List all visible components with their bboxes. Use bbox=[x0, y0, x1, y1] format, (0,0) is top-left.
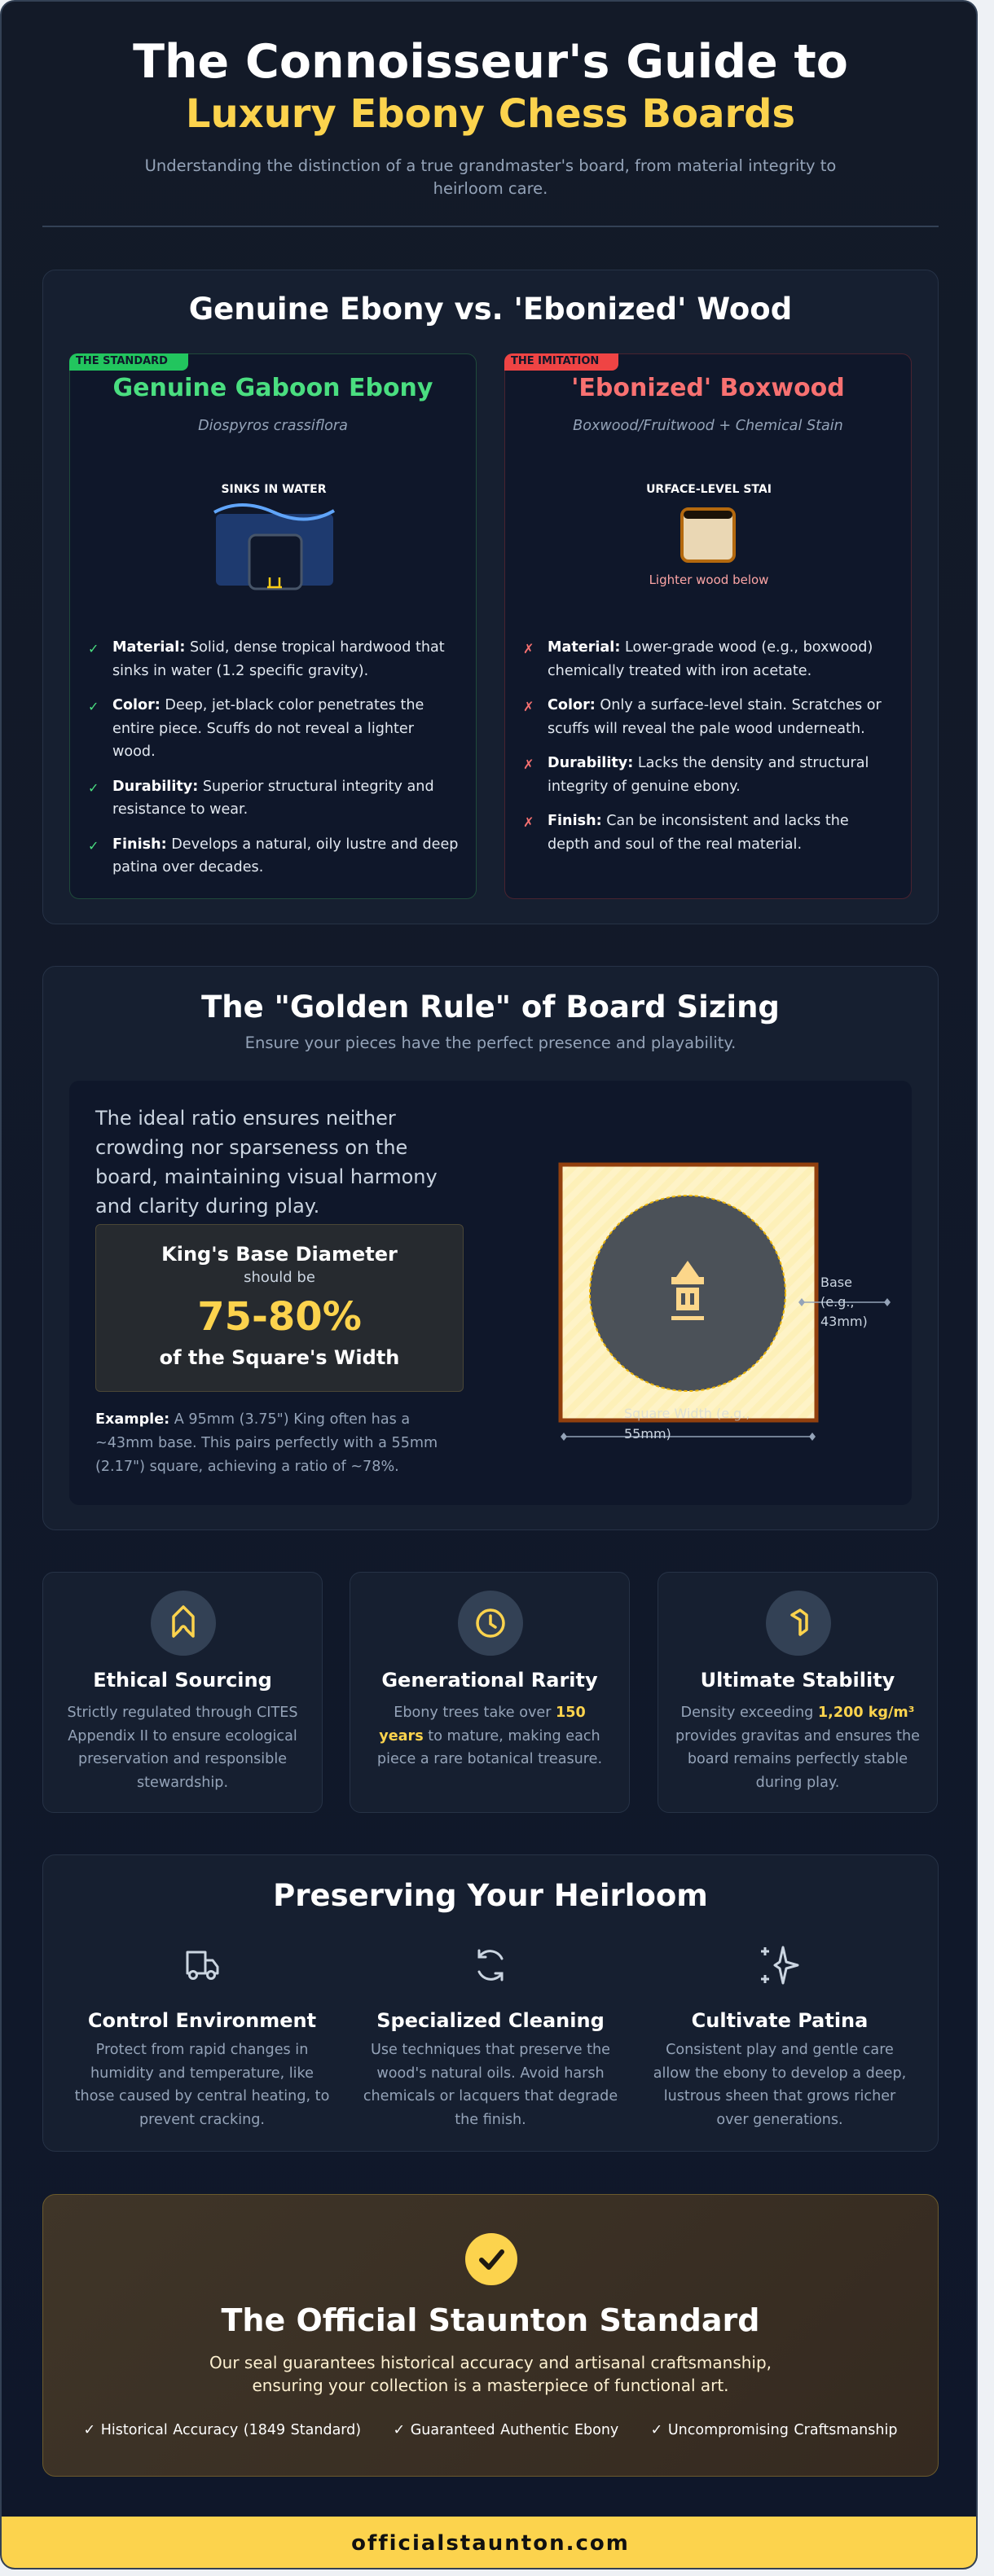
card: ebonized: ✗ bbox=[523, 641, 534, 656]
feature: ultimate stability: Density exceeding 1,200 kg/m³ provides gravitas and ensures the board remains perfectly stable during play. bbox=[675, 1705, 920, 1790]
col: cultivate patina: Consistent play and gentle care allow the ebony to develop a deep, lustrous sheen that grows richer over generations. bbox=[653, 2042, 906, 2127]
feature: generational rarity: Generational Rarity bbox=[381, 1669, 598, 1692]
card: ebonized: ✗ bbox=[523, 814, 534, 830]
col: cultivate patina: Cultivate Patina bbox=[692, 2009, 868, 2032]
list genuine: Material: Solid, dense tropical hardwood that sinks in water (1.2 specific gravity). bbox=[112, 639, 445, 679]
list ebonized: Durability: Lacks the density and structural integrity of genuine ebony. bbox=[548, 755, 869, 795]
tag: the imitation bbox=[504, 353, 618, 371]
title: The Connoisseur's Guide to bbox=[133, 35, 848, 89]
title bbox=[133, 35, 848, 137]
intro text: The ideal ratio ensures neither crowding nor sparseness on the board, maintaining visual harmony and clarity during play. bbox=[95, 1107, 438, 1218]
list genuine: Finish: Develops a natural, oily lustre and deep patina over decades. bbox=[112, 836, 458, 875]
feature: generational rarity bbox=[350, 1572, 630, 1813]
panel: official staunton standard bbox=[42, 2194, 939, 2477]
tag: the imitation: THE IMITATION bbox=[511, 355, 599, 367]
feature: ethical sourcing: Ethical Sourcing bbox=[93, 1669, 272, 1692]
latin name: Diospyros crassiflora bbox=[198, 418, 348, 434]
heading golden rule: The "Golden Rule" of Board Sizing bbox=[201, 990, 780, 1025]
text standard: Our seal guarantees historical accuracy and artisanal craftsmanship, bbox=[209, 2353, 772, 2372]
feature: ethical sourcing bbox=[42, 1572, 323, 1813]
icon: sinks in water bbox=[213, 483, 335, 590]
subtitle: Understanding the distinction of a true grandmaster's board, from material integrity to heirloom care. bbox=[145, 156, 836, 198]
panel: golden rule bbox=[42, 966, 939, 1530]
checklist: ✓ Historical Accuracy (1849 Standard) ✓ Guaranteed Authentic Ebony ✓ Uncompromising Craftsmanship bbox=[84, 2422, 897, 2438]
card title ebonized: 'Ebonized' Boxwood bbox=[571, 374, 845, 402]
icon: sinks in water: SINKS IN WATER bbox=[221, 483, 327, 496]
list ebonized: Finish: Can be inconsistent and lacks the depth and soul of the real material. bbox=[548, 813, 849, 852]
card: genuine: ✓ bbox=[88, 641, 99, 656]
list ebonized: Color: Only a surface-level stain. Scratches or scuffs will reveal the pale wood underneath. bbox=[548, 697, 882, 736]
diagram: square and base: (e.g., bbox=[820, 1294, 854, 1310]
diagram: square and base: Base bbox=[820, 1275, 852, 1290]
col: control environment: Protect from rapid changes in humidity and temperature, like those caused by central heating, to prevent cracking. bbox=[75, 2042, 329, 2127]
card: ebonized: ✗ bbox=[523, 699, 534, 714]
icon: leaf bbox=[151, 1591, 216, 1656]
footer bbox=[2, 2517, 979, 2571]
highlight box: King's Base Diameter bbox=[161, 1243, 398, 1266]
heading preserving: Preserving Your Heirloom bbox=[273, 1878, 708, 1913]
icon: surface stain bbox=[646, 483, 772, 587]
feature: ethical sourcing: Strictly regulated through CITES Appendix II to ensure ecological preservation and responsible stewardship. bbox=[67, 1705, 298, 1790]
icon: surface stain: Lighter wood below bbox=[649, 573, 768, 587]
diagram: square and base: Square Width (e.g., bbox=[624, 1406, 750, 1421]
list genuine: Color: Deep, jet-black color penetrates the entire piece. Scuffs do not reveal a lighter wood. bbox=[112, 697, 424, 760]
col: control environment bbox=[75, 1951, 329, 2127]
tag: the standard: THE STANDARD bbox=[76, 355, 168, 367]
panel: preserving heirloom bbox=[42, 1854, 939, 2152]
card: genuine: ✓ bbox=[88, 699, 99, 714]
text standard bbox=[209, 2353, 772, 2395]
list ebonized: Material: Lower-grade wood (e.g., boxwood) chemically treated with iron acetate. bbox=[548, 639, 873, 679]
highlight box: of the Square's Width bbox=[160, 1346, 399, 1369]
feature: ultimate stability bbox=[658, 1572, 938, 1813]
subtitle ebonized: Boxwood/Fruitwood + Chemical Stain bbox=[573, 418, 843, 434]
diagram: square and base bbox=[559, 1163, 891, 1442]
subheading: Ensure your pieces have the perfect presence and playability. bbox=[245, 1033, 736, 1052]
icon: surface stain: URFACE-LEVEL STAI bbox=[646, 483, 772, 496]
card: ebonized bbox=[504, 353, 912, 899]
list ebonized bbox=[523, 639, 882, 852]
col: specialized cleaning bbox=[363, 1950, 618, 2127]
example text: Example: A 95mm (3.75") King often has a ~43mm base. This pairs perfectly with a 55mm (2.17") square, achieving a ratio of ~78%. bbox=[95, 1411, 438, 1475]
icon: clock bbox=[458, 1591, 523, 1656]
footer: officialstaunton.com bbox=[351, 2531, 630, 2556]
card title genuine: Genuine Gaboon Ebony bbox=[112, 374, 433, 402]
icon: check seal bbox=[465, 2233, 517, 2285]
card: genuine: ✓ bbox=[88, 780, 99, 795]
card: ebonized: ✗ bbox=[523, 757, 534, 772]
inner box bbox=[69, 1081, 912, 1505]
highlight box: 75-80% bbox=[197, 1294, 362, 1340]
list genuine bbox=[88, 639, 458, 875]
diagram: square and base: 55mm) bbox=[624, 1426, 671, 1442]
card: genuine: ✓ bbox=[88, 837, 99, 854]
title: Luxury Ebony Chess Boards bbox=[186, 91, 795, 137]
icon: cube bbox=[766, 1591, 831, 1656]
feature: generational rarity: Ebony trees take over 150 years to mature, making each piece a rare botanical treasure. bbox=[377, 1705, 602, 1767]
heading standard: The Official Staunton Standard bbox=[222, 2302, 759, 2338]
col: control environment: Control Environment bbox=[88, 2009, 316, 2032]
highlight box bbox=[95, 1224, 464, 1392]
col: cultivate patina bbox=[653, 1946, 906, 2127]
panel: genuine vs ebonized bbox=[42, 270, 939, 924]
diagram: square and base: 43mm) bbox=[820, 1314, 868, 1329]
highlight box: should be bbox=[244, 1269, 315, 1286]
tag: the standard bbox=[69, 353, 188, 371]
col: specialized cleaning: Specialized Cleaning bbox=[376, 2009, 605, 2032]
col: specialized cleaning: Use techniques that preserve the wood's natural oils. Avoid harsh chemicals or lacquers that degrade the finish. bbox=[363, 2042, 618, 2127]
text standard: ensuring your collection is a masterpiece of functional art. bbox=[252, 2376, 729, 2395]
card: genuine bbox=[69, 353, 477, 899]
feature: ultimate stability: Ultimate Stability bbox=[701, 1669, 895, 1692]
section heading: Genuine Ebony vs. 'Ebonized' Wood bbox=[189, 292, 792, 327]
list genuine: Durability: Superior structural integrity and resistance to wear. bbox=[112, 779, 434, 818]
